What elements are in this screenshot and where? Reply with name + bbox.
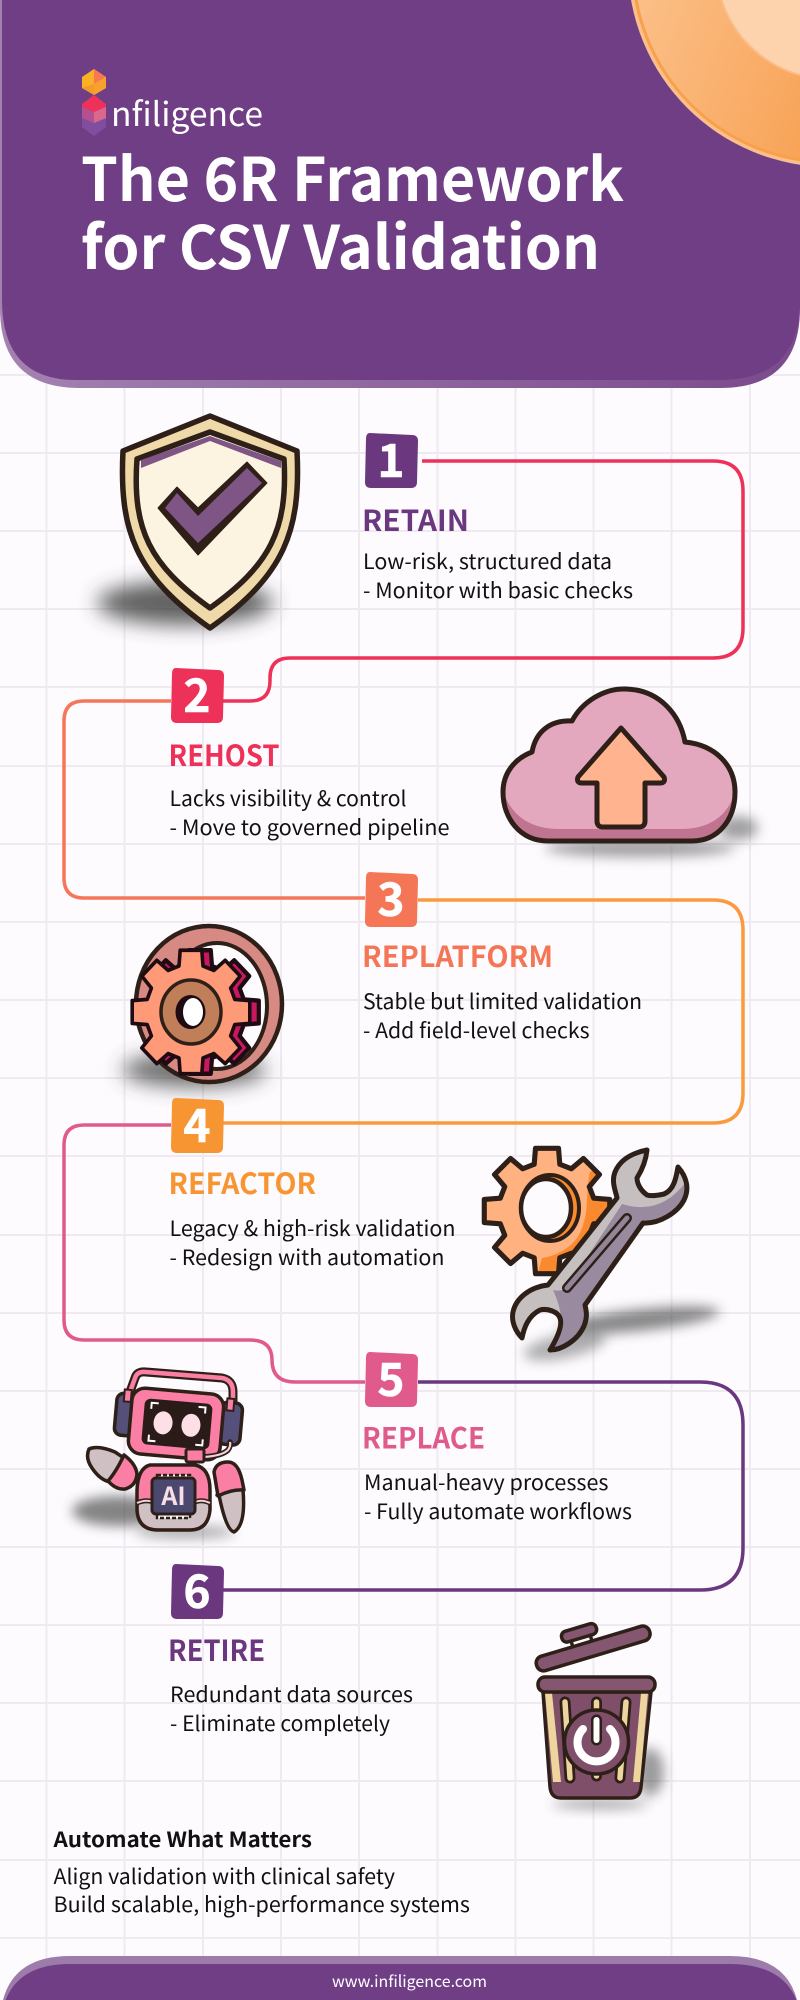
connector: step 5 to 6 — [223, 1382, 743, 1590]
text: retire: - Eliminate completely — [170, 1708, 390, 1738]
text: replace: Manual-heavy processes — [364, 1467, 609, 1497]
closing note: Automate What Matters — [52, 1824, 312, 1854]
badge 4: 4 — [183, 1090, 211, 1156]
decorative orange circle — [628, 0, 800, 167]
chip with AI label — [152, 1475, 195, 1518]
text: retire: Redundant data sources — [170, 1679, 413, 1709]
text: replatform — [363, 986, 642, 1045]
badge 1 — [365, 425, 418, 491]
closing note: Build scalable, high-performance systems — [54, 1889, 470, 1919]
panel: step 3 replatform — [362, 864, 642, 1045]
connector: step 1 to 2 — [223, 461, 743, 701]
icon: cloud upload — [500, 689, 758, 857]
text: retire — [170, 1679, 413, 1738]
panel: header — [0, 0, 800, 388]
panel: step 4 refactor — [168, 1090, 456, 1272]
badge 2 — [171, 660, 224, 726]
icon: AI robot — [72, 1372, 244, 1538]
text: refactor: - Redesign with automation — [170, 1242, 444, 1272]
chip with AI label: AI — [160, 1477, 186, 1513]
icon: gear and wrench — [484, 1148, 721, 1366]
icon: trash can with power symbol — [530, 1608, 664, 1809]
text: retain: - Monitor with basic checks — [363, 575, 633, 605]
panel: step 1 retain — [362, 425, 633, 605]
badge 3 — [365, 864, 418, 930]
heading: retain: RETAIN — [362, 498, 469, 540]
text: replatform: - Add field-level checks — [363, 1015, 590, 1045]
heading: replatform: REPLATFORM — [362, 934, 553, 976]
heading: replace: REPLACE — [362, 1416, 485, 1458]
badge 5: 5 — [377, 1344, 405, 1410]
icon: gear in ring — [122, 926, 282, 1087]
badge 2: 2 — [183, 660, 211, 726]
badge 6 — [171, 1556, 224, 1622]
logo: nfiligence — [111, 88, 263, 136]
text: replace — [364, 1467, 632, 1526]
text: retain — [363, 546, 633, 605]
title: The 6R Framework — [81, 132, 624, 219]
text: rehost — [170, 783, 450, 842]
text: refactor: Legacy & high-risk validation — [170, 1213, 456, 1243]
footer url: www.infiligence.com — [332, 1968, 487, 1992]
text: retain: Low-risk, structured data — [363, 546, 612, 576]
text: refactor — [170, 1213, 456, 1272]
closing note: Align validation with clinical safety — [54, 1861, 395, 1891]
badge 5 — [365, 1344, 418, 1410]
text: replace: - Fully automate workflows — [364, 1496, 632, 1526]
text: replatform: Stable but limited validation — [363, 986, 642, 1016]
panel: step 6 retire — [168, 1556, 413, 1738]
heading: refactor: REFACTOR — [168, 1161, 316, 1203]
logo — [82, 69, 263, 136]
heading: rehost: REHOST — [168, 733, 280, 775]
text: rehost: - Move to governed pipeline — [170, 812, 450, 842]
panel: step 5 replace — [362, 1344, 632, 1526]
connector: step 2 to 3 — [64, 701, 365, 898]
text: rehost: Lacks visibility & control — [170, 783, 407, 813]
heading: retire: RETIRE — [168, 1628, 265, 1670]
badge 6: 6 — [183, 1556, 211, 1622]
badge 4 — [171, 1090, 224, 1156]
title: for CSV Validation — [81, 200, 600, 287]
badge 3: 3 — [377, 864, 405, 930]
connector: step 4 to 5 — [64, 1125, 365, 1382]
panel: step 2 rehost — [168, 660, 450, 842]
footer — [0, 1956, 800, 2000]
title — [81, 132, 624, 287]
connector: step 3 to 4 — [223, 900, 743, 1123]
closing note — [52, 1824, 470, 1919]
icon: shield with check — [97, 416, 298, 628]
badge 1: 1 — [377, 425, 405, 491]
